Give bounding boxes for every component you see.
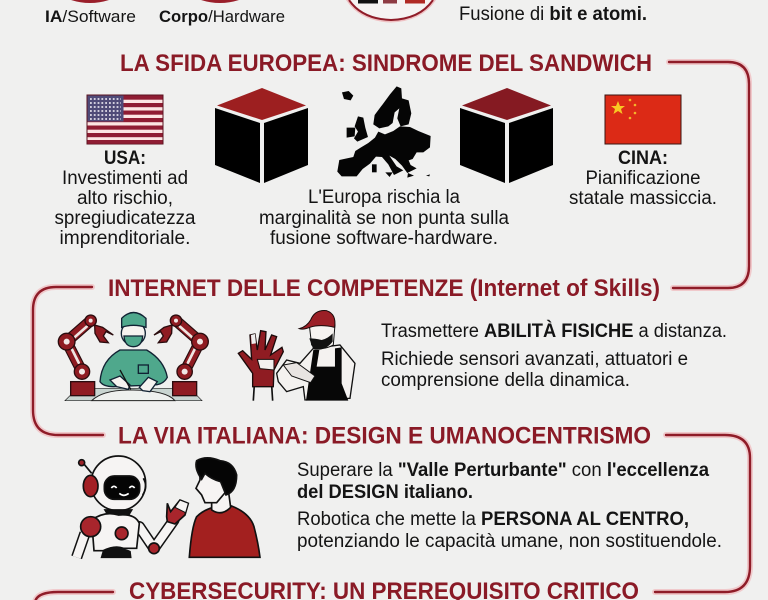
text: Europe — [259, 187, 509, 249]
icon: USA flag — [87, 95, 163, 144]
text: fusion of bits and atoms: Fusione di bit e atomi. — [459, 4, 647, 25]
text: China: Pianificazione — [586, 168, 700, 189]
text: Europe: L'Europa rischia la — [308, 187, 460, 208]
icon: left cube — [215, 88, 308, 183]
text: Italian way: potenziando le capacità umane, non sostituendole. — [297, 531, 722, 552]
text: USA: USA: — [104, 148, 146, 169]
label: IA/Software: IA/Software — [45, 7, 136, 26]
connector: left bracket bottom — [35, 592, 113, 600]
connector: right bracket top — [669, 62, 749, 288]
label: Corpo/Hardware: Corpo/Hardware — [159, 7, 285, 26]
icon: person — [189, 458, 260, 557]
icon: right cube — [460, 88, 553, 183]
text: Italian way: Robotica che mette la PERSONA AL CENTRO, — [297, 509, 689, 530]
icon: fusion circle — [349, 0, 433, 20]
icon: mechanic with haptic glove — [238, 311, 355, 401]
text: China — [569, 148, 717, 209]
text: skills transmission: Trasmettere ABILITÀ FISICHE a distanza. — [381, 320, 727, 342]
heading: la sfida europea: LA SFIDA EUROPEA: SINDROME DEL SANDWICH — [120, 50, 652, 77]
text: skills transmission: comprensione della dinamica. — [381, 370, 630, 391]
icon: China flag — [605, 95, 681, 144]
text: Italian way: del DESIGN italiano. — [297, 482, 473, 503]
text: skills transmission — [381, 320, 727, 391]
icon: body circle remnant — [201, 0, 239, 3]
icon: Europe map — [337, 86, 431, 178]
text: Europe: marginalità se non punta sulla — [259, 208, 509, 229]
text: China: CINA: — [618, 148, 668, 169]
text: USA: spregiudicatezza — [54, 208, 196, 229]
text: Europe: fusione software-hardware. — [270, 228, 498, 249]
icon: robot — [77, 456, 188, 557]
connector: left bracket middle — [33, 287, 103, 435]
text: USA: imprenditoriale. — [60, 228, 190, 249]
text: USA — [54, 148, 196, 249]
text: skills transmission: Richiede sensori avanzati, attuatori e — [381, 349, 688, 370]
heading: la via italiana: LA VIA ITALIANA: DESIGN E UMANOCENTRISMO — [118, 422, 651, 450]
connector: right bracket lower — [655, 435, 750, 592]
text: USA: alto rischio, — [77, 188, 173, 209]
icon: AI circle remnant — [71, 0, 109, 3]
text: Italian way — [297, 460, 722, 552]
heading: internet delle competenze: INTERNET DELLE COMPETENZE (Internet of Skills) — [108, 275, 660, 302]
text: USA: Investimenti ad — [62, 168, 188, 189]
text: China: statale massiccia. — [569, 188, 717, 209]
text: Italian way: Superare la "Valle Perturbante" con l'eccellenza — [297, 460, 709, 481]
icon: surgeon with robot arms — [58, 312, 208, 401]
